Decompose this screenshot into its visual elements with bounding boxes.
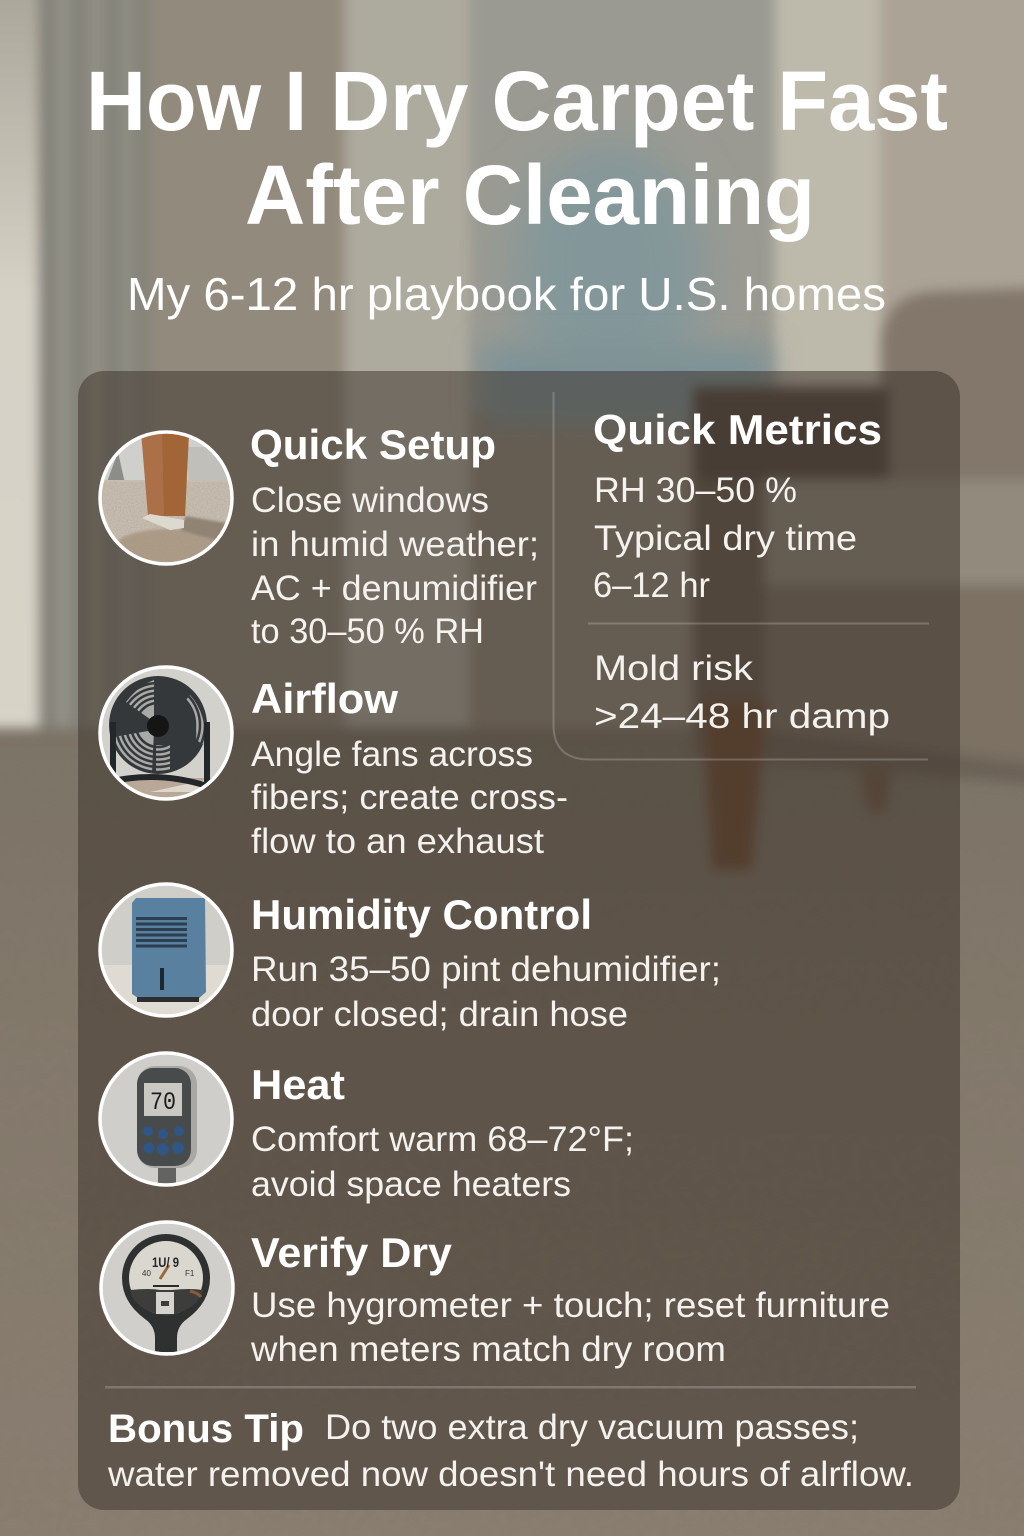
heading: quick setup: Quick Setup [250, 421, 496, 468]
panel: quick metrics [554, 392, 929, 760]
icon: floor fan [100, 667, 232, 800]
text: quick setup body [251, 481, 539, 651]
subtitle: My 6-12 hr playbook for U.S. homes [127, 268, 886, 320]
icon: thermostat remote [100, 1053, 232, 1190]
metric: relative humidity: RH 30–50 % [594, 471, 797, 510]
text: humidity control body [251, 950, 721, 1034]
text: quick setup body: AC + denumidifier [251, 569, 537, 608]
heading: heat: Heat [251, 1061, 345, 1108]
title: After Cleaning [245, 148, 815, 242]
icon: hygrometer gauge [100, 1222, 234, 1356]
text: quick setup body: Close windows [251, 481, 489, 520]
text: airflow body: Angle fans across [251, 735, 533, 774]
callout: bonus tip: water removed now doesn't need hours of alrflow. [107, 1455, 914, 1494]
heading: humidity control: Humidity Control [251, 891, 592, 938]
metric: mold risk: >24–48 hr damp [594, 697, 890, 736]
text: quick setup body: in humid weather; [251, 525, 539, 564]
metric: typical dry time: Typical dry time [594, 519, 857, 558]
title [86, 54, 948, 242]
text: airflow body: fibers; create cross- [251, 778, 568, 817]
metric: typical dry time: 6–12 hr [593, 566, 710, 605]
text: verify dry body: when meters match dry room [250, 1330, 726, 1369]
icon: furniture leg on carpet block [100, 432, 232, 564]
icon: hygrometer gauge: F1 [185, 1269, 195, 1278]
metric: mold risk: Mold risk [594, 649, 754, 688]
heading: airflow: Airflow [251, 675, 398, 722]
text: heat body: avoid space heaters [251, 1165, 571, 1204]
icon: hygrometer gauge: 40 [142, 1269, 151, 1278]
step: verify dry [100, 1222, 890, 1369]
text: heat body [251, 1120, 634, 1204]
icon: blue dehumidifier [100, 884, 232, 1020]
icon: thermostat remote: 70 [150, 1088, 176, 1117]
text: humidity control body: door closed; drain hose [251, 995, 628, 1034]
heading: quick metrics: Quick Metrics [593, 406, 882, 453]
heading: verify dry: Verify Dry [251, 1229, 453, 1276]
callout: bonus tip: Do two extra dry vacuum passes; [325, 1408, 859, 1447]
text: verify dry body: Use hygrometer + touch; reset furniture [251, 1286, 890, 1325]
text: heat body: Comfort warm 68–72°F; [251, 1120, 634, 1159]
step: humidity control [100, 884, 721, 1034]
text: verify dry body [250, 1286, 890, 1369]
text: humidity control body: Run 35–50 pint dehumidifier; [251, 950, 721, 989]
metric: typical dry time [593, 519, 857, 605]
step: airflow [100, 667, 568, 861]
step: quick setup [100, 421, 539, 651]
step: heat [100, 1053, 634, 1204]
text: quick setup body: to 30–50 % RH [251, 612, 484, 651]
panel: main translucent card [78, 371, 960, 1510]
callout: bonus tip: Bonus Tip [108, 1407, 304, 1451]
title: How I Dry Carpet Fast [86, 54, 948, 148]
icon: hygrometer gauge: 1U/ 9 [152, 1254, 179, 1270]
metric: mold risk [594, 649, 890, 736]
text: airflow body: flow to an exhaust [251, 822, 544, 861]
text: airflow body [251, 735, 568, 861]
callout: bonus tip [107, 1407, 914, 1494]
